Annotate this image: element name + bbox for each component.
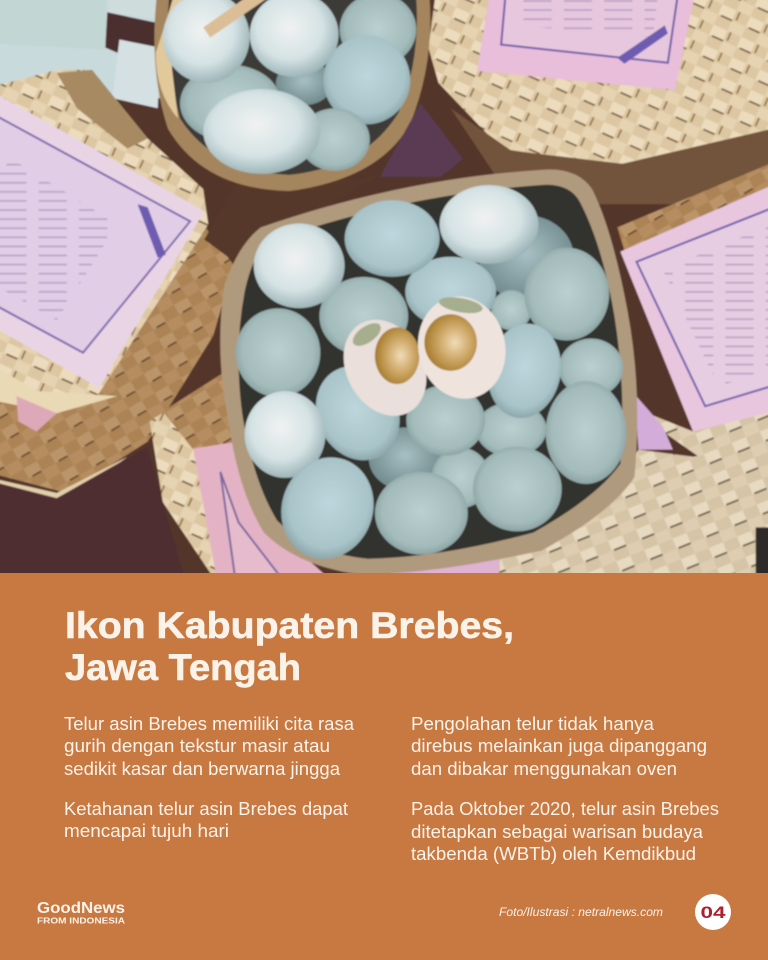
wicker basket: bottom right	[540, 449, 768, 573]
title: Jawa Tengah	[65, 647, 301, 688]
title	[65, 605, 514, 688]
wicker basket: lower left	[0, 224, 234, 498]
photo: salted eggs in woven baskets	[0, 0, 768, 593]
pink label: left basket	[0, 88, 204, 388]
basket interior	[239, 185, 622, 559]
text block: processing: dan dibakar menggunakan oven	[411, 758, 677, 779]
magenta label behind the centre basket	[380, 103, 463, 177]
title: Ikon Kabupaten Brebes,	[65, 605, 514, 646]
eggs	[236, 185, 626, 572]
pink label: top right	[477, 0, 696, 90]
table surface	[0, 462, 162, 503]
basket rim	[220, 169, 637, 575]
text block: shelf life: mencapai tujuh hari	[64, 820, 229, 841]
text block: heritage status: takbenda (WBTb) oleh Kemdikbud	[411, 843, 696, 864]
text block: taste and texture: sedikit kasar dan berwarna jingga	[64, 758, 341, 779]
round basket: top centre with eggs	[154, 0, 430, 265]
wicker basket: right	[617, 159, 768, 460]
photo credit: Foto/Ilustrasi : netralnews.com	[499, 905, 663, 919]
page number badge: 04	[700, 903, 726, 922]
text block: taste and texture: Telur asin Brebes memiliki cita rasa	[64, 713, 355, 734]
text block: taste and texture: gurih dengan tekstur masir atau	[64, 735, 330, 756]
documents at the top left	[0, 0, 170, 108]
text block: shelf life: Ketahanan telur asin Brebes dapat	[64, 798, 348, 819]
halved egg: right	[416, 296, 506, 400]
pink label: right basket	[620, 181, 768, 450]
logo: GoodNews from Indonesia: GoodNews	[37, 900, 125, 917]
text block: heritage status: ditetapkan sebagai warisan budaya	[411, 821, 704, 842]
text block: heritage status	[411, 798, 719, 864]
halved egg: left	[342, 319, 428, 417]
wicker basket: bottom centre left	[150, 373, 542, 588]
text block: processing	[411, 713, 707, 779]
wicker basket: top right	[428, 0, 768, 204]
text block: processing: direbus melainkan juga dipanggang	[411, 735, 707, 756]
text block: taste and texture	[64, 713, 355, 779]
centre basket with eggs	[220, 169, 637, 575]
text block: processing: Pengolahan telur tidak hanya	[411, 713, 655, 734]
page number badge	[695, 894, 731, 930]
wicker basket: upper left	[0, 70, 208, 431]
text block: shelf life	[64, 798, 348, 841]
logo: GoodNews from Indonesia: FROM INDONESIA	[37, 916, 125, 926]
logo: GoodNews from Indonesia	[37, 900, 125, 926]
text block: heritage status: Pada Oktober 2020, telur asin Brebes	[411, 798, 719, 819]
